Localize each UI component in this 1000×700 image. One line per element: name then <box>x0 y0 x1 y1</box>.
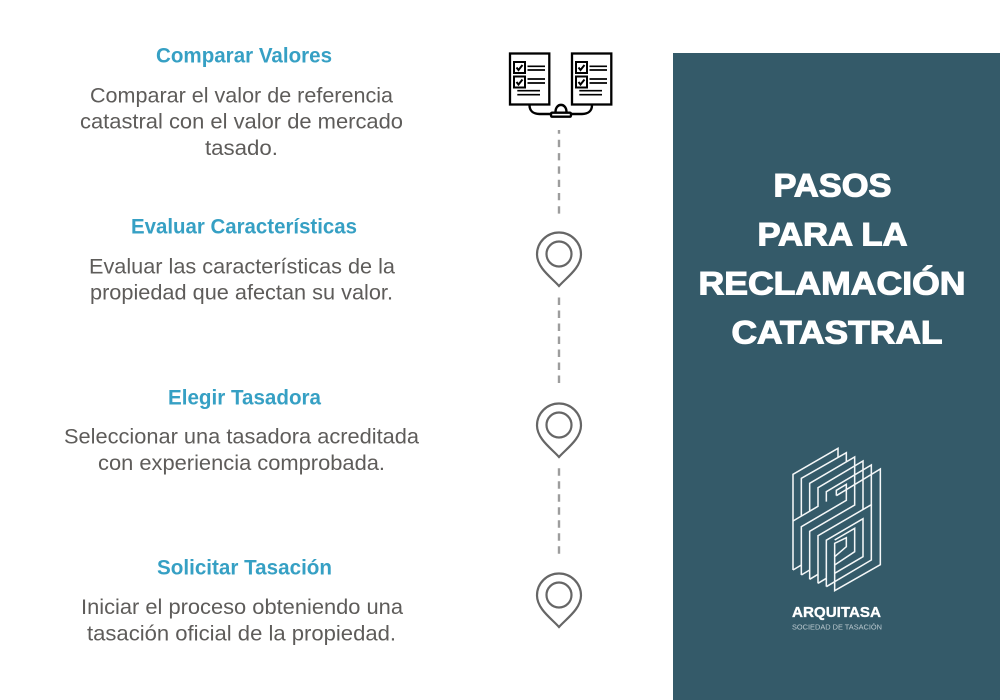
step 2: evaluar características <box>89 214 395 304</box>
text block: Evaluar las características de la <box>89 254 395 278</box>
logo: Arquitasa <box>792 448 882 632</box>
text block: tasado. <box>205 136 278 160</box>
dashed connector 3 <box>558 468 560 555</box>
text block <box>81 595 403 646</box>
panel: right title panel <box>673 53 1000 700</box>
left document <box>510 54 549 104</box>
heading: Solicitar Tasación <box>157 556 332 580</box>
heading: Elegir Tasadora <box>168 386 322 410</box>
text block: propiedad que afectan su valor. <box>90 280 393 304</box>
icon: location pin 2 <box>537 404 581 457</box>
text block: tasación oficial de la propiedad. <box>87 622 396 646</box>
text block: catastral con el valor de mercado <box>80 110 403 134</box>
text block: Iniciar el proceso obteniendo una <box>81 595 403 619</box>
text block: Comparar el valor de referencia <box>90 84 393 108</box>
title <box>698 168 966 350</box>
scale base <box>551 105 571 117</box>
text block: con experiencia comprobada. <box>98 451 385 475</box>
title: PASOS <box>774 168 892 204</box>
heading: Comparar Valores <box>156 44 332 68</box>
title: PARA LA <box>758 216 908 252</box>
step 1: comparar valores <box>80 44 403 160</box>
text block: Seleccionar una tasadora acreditada <box>64 424 419 448</box>
title: CATASTRAL <box>732 314 942 350</box>
dashed connector 2 <box>558 298 560 384</box>
text block <box>64 424 419 475</box>
step 3: elegir tasadora <box>64 386 419 475</box>
logo tagline: SOCIEDAD DE TASACIÓN <box>792 622 882 632</box>
icon: location pin 3 <box>537 574 581 627</box>
heading: Evaluar Características <box>131 214 357 238</box>
icon: location pin 1 <box>537 232 581 286</box>
text block <box>80 84 403 160</box>
title: RECLAMACIÓN <box>698 266 966 302</box>
step 4: solicitar tasación <box>81 556 403 646</box>
text block <box>89 254 395 304</box>
scale connector <box>530 105 592 114</box>
icon: logo mark <box>793 448 880 591</box>
icon: documents on a scale <box>510 54 611 117</box>
right document <box>572 54 611 104</box>
logo name: ARQUITASA <box>792 605 882 621</box>
dashed connector 1 <box>558 130 560 214</box>
